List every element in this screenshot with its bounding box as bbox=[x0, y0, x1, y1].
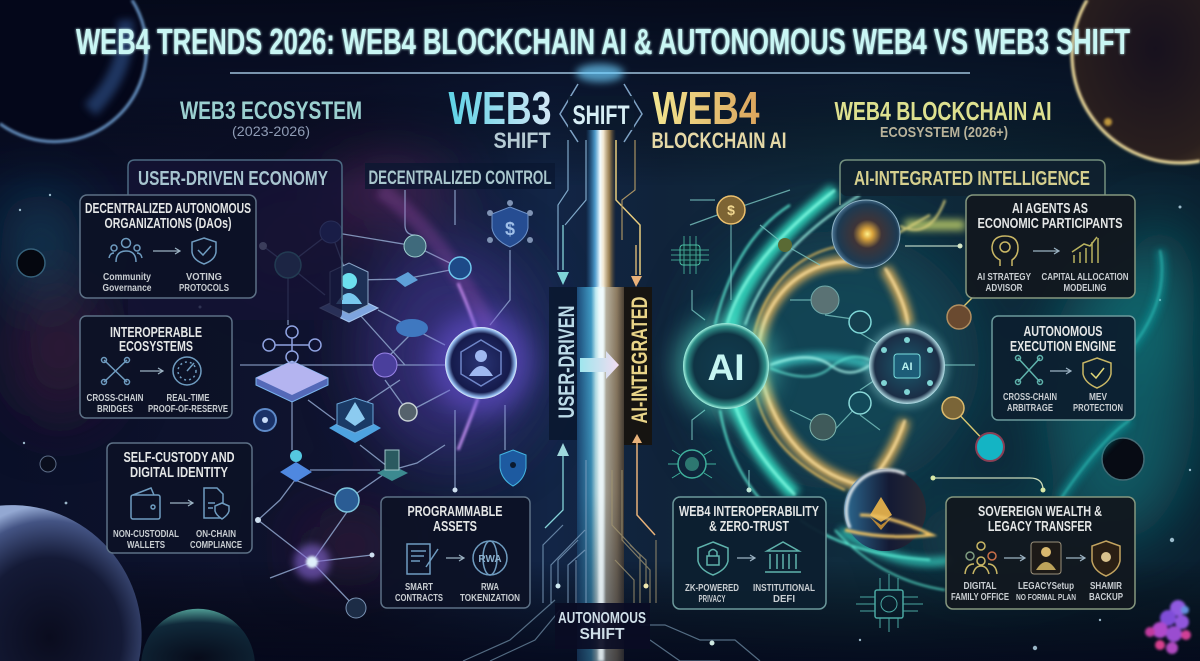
panel: DAOs: VOTING bbox=[186, 271, 222, 283]
panel: ai agents: ECONOMIC PARTICIPANTS bbox=[978, 215, 1122, 232]
icon: arbitrage cross bbox=[1016, 356, 1042, 384]
panel: sovereign wealth: DIGITAL bbox=[964, 580, 997, 592]
node: shield dollar: $ bbox=[505, 219, 515, 239]
panel: user-driven header bbox=[128, 160, 342, 320]
planet: bottom left small bbox=[141, 609, 255, 661]
panel: sovereign wealth: BACKUP bbox=[1089, 591, 1123, 603]
panel: DAOs: Governance bbox=[102, 282, 152, 294]
arrow: center shift right bbox=[580, 351, 619, 379]
node: ai orb bbox=[676, 316, 776, 416]
panel: ai agents: MODELING bbox=[1064, 282, 1106, 294]
energy swirls: web4 centre bbox=[715, 190, 1162, 590]
panel: ai agents: AI STRATEGY bbox=[977, 271, 1031, 283]
shift badge bbox=[560, 84, 642, 142]
node: web chip icon bbox=[668, 450, 716, 478]
label: decentralized control bbox=[365, 163, 555, 189]
node: shield dollar bbox=[487, 200, 533, 247]
network: web3 nodes bbox=[240, 190, 510, 608]
planet: bottom left large bbox=[0, 505, 142, 661]
arrow: web3 lane down bbox=[557, 225, 569, 285]
node: bottom chip bbox=[856, 574, 923, 632]
arrow: web4 lane up bbox=[632, 434, 655, 535]
panel: programmable assets: RWA bbox=[481, 581, 499, 593]
arrow: legacy to shamir bbox=[1066, 555, 1085, 561]
panel: interoperable ecosystems: BRIDGES bbox=[97, 403, 133, 415]
central beam divider bbox=[463, 130, 760, 661]
heading: web3 ecosystem: (2023-2026) bbox=[232, 123, 310, 139]
panel: programmable assets: PROGRAMMABLE bbox=[408, 503, 502, 520]
panel: self-custody: COMPLIANCE bbox=[190, 539, 242, 551]
panel: sovereign wealth: SHAMIR bbox=[1090, 580, 1122, 592]
heading: web3 ecosystem bbox=[180, 97, 362, 139]
panel: autonomous execution: MEV bbox=[1089, 391, 1107, 403]
arrow: contract to rwa bbox=[446, 555, 464, 561]
panel: web4 interoperability bbox=[673, 497, 826, 609]
heading: web4 ecosystem: WEB4 BLOCKCHAIN AI bbox=[834, 96, 1052, 126]
arrow: web4 lane down bbox=[631, 245, 642, 287]
panel: autonomous execution: CROSS-CHAIN bbox=[1003, 391, 1057, 403]
icon: wallet bbox=[131, 488, 160, 519]
panel: DAOs: DECENTRALIZED AUTONOMOUS bbox=[85, 200, 251, 217]
node: glowing block platform bbox=[256, 326, 328, 402]
arrow: arbitrage to protection bbox=[1050, 368, 1071, 374]
panel: interoperable ecosystems: PROOF-OF-RESERVE bbox=[148, 403, 228, 415]
label: autonomous shift bbox=[555, 603, 650, 649]
node: dollar coin bbox=[717, 196, 792, 252]
panel: programmable assets: SMART bbox=[405, 581, 433, 593]
node: ethereum platform bbox=[329, 398, 381, 443]
arrow: community to voting bbox=[153, 248, 180, 254]
node: user hex platform bbox=[320, 263, 378, 322]
network: web4 links bbox=[690, 190, 1046, 492]
planet: right dark bbox=[1102, 438, 1144, 480]
panel: ai-integrated header: AI-INTEGRATED INTELLIGENCE bbox=[854, 168, 1090, 190]
icon: bar chart bbox=[1072, 237, 1098, 263]
panel: programmable assets bbox=[381, 497, 530, 608]
panel: interoperable ecosystems: REAL-TIME bbox=[166, 392, 210, 404]
panel: interoperable ecosystems: CROSS-CHAIN bbox=[86, 392, 144, 404]
panel: self-custody: NON-CUSTODIAL bbox=[113, 528, 179, 540]
icon: smart contract bbox=[407, 544, 438, 574]
panel: ai agents bbox=[966, 195, 1135, 298]
panel: interoperable ecosystems: INTEROPERABLE bbox=[110, 324, 202, 341]
panel: DAOs bbox=[80, 195, 256, 298]
panel: web4 interoperability: INSTITUTIONAL bbox=[753, 582, 815, 594]
panel: ai agents: AI AGENTS AS bbox=[1012, 200, 1088, 217]
arrow: family to legacy bbox=[1004, 555, 1025, 561]
heading: web3 shift: SHIFT bbox=[494, 128, 551, 153]
node: gold swirl orb bbox=[832, 200, 900, 268]
panel: ai agents: CAPITAL ALLOCATION bbox=[1042, 271, 1128, 283]
node: small shield key bbox=[500, 450, 526, 486]
icon: cross-chain bridges bbox=[102, 358, 130, 384]
panel: sovereign wealth: SOVEREIGN WEALTH & bbox=[978, 503, 1102, 520]
panel: ai agents: ADVISOR bbox=[986, 282, 1023, 294]
node: small nodes bbox=[254, 221, 471, 618]
node: user platform low bbox=[280, 450, 312, 482]
panel: self-custody: ON-CHAIN bbox=[196, 528, 236, 540]
panel: DAOs: Community bbox=[103, 271, 151, 283]
planet: top left ring bbox=[0, 0, 147, 142]
heading: web3 ecosystem: WEB3 ECOSYSTEM bbox=[180, 97, 362, 125]
planet: left small dark bbox=[17, 249, 56, 472]
arrow: privacy to defi bbox=[737, 555, 755, 561]
text: rwa icon label: RWA bbox=[478, 554, 502, 565]
icon: legacy portrait bbox=[1031, 542, 1061, 574]
icon: voting shield bbox=[192, 238, 216, 264]
panel: sovereign wealth: LEGACY TRANSFER bbox=[988, 518, 1092, 535]
node: ai orb: AI bbox=[708, 347, 744, 388]
panel: autonomous execution: ARBITRAGE bbox=[1007, 402, 1053, 414]
panel: self-custody bbox=[107, 443, 252, 553]
node: chip top bbox=[671, 236, 709, 274]
node: dollar coin: $ bbox=[727, 202, 735, 218]
shift badge: SHIFT bbox=[572, 100, 630, 130]
panel: web4 interoperability: & ZERO-TRUST bbox=[709, 518, 789, 535]
heading: web4 blockchain ai: BLOCKCHAIN AI bbox=[652, 128, 786, 153]
panel: interoperable ecosystems: ECOSYSTEMS bbox=[119, 338, 193, 355]
node: ai chip orb: AI bbox=[902, 361, 912, 373]
panel: web4 interoperability: DEFI bbox=[773, 593, 795, 605]
label: ai-integrated vertical: AI-INTEGRATED bbox=[627, 296, 652, 424]
arrow: wallet to compliance bbox=[170, 500, 193, 506]
panel: sovereign wealth: FAMILY OFFICE bbox=[951, 591, 1009, 603]
panel: web4 interoperability: PRIVACY bbox=[698, 593, 726, 605]
label: autonomous shift: SHIFT bbox=[580, 626, 625, 643]
logo: molecule cluster bbox=[1145, 600, 1191, 654]
panel: programmable assets: TOKENIZATION bbox=[460, 592, 520, 604]
label: decentralized control: DECENTRALIZED CONTROL bbox=[368, 168, 552, 189]
label: user-driven vertical bbox=[549, 287, 579, 440]
panel: user-driven header: USER-DRIVEN ECONOMY bbox=[138, 168, 328, 190]
panel: autonomous execution: EXECUTION ENGINE bbox=[1010, 338, 1116, 355]
icon: privacy lock shield bbox=[698, 542, 728, 575]
icon: compliance doc bbox=[204, 488, 229, 519]
node: small spheres bbox=[810, 286, 1004, 461]
panel: DAOs: PROTOCOLS bbox=[179, 282, 229, 294]
node: calculator platform bbox=[377, 450, 408, 481]
icon: rwa globe bbox=[473, 541, 507, 575]
panel: ai-integrated header bbox=[840, 160, 1105, 205]
heading: web3 shift bbox=[448, 82, 552, 153]
arrow: bridges to proof bbox=[140, 368, 163, 374]
heading: web4 ecosystem bbox=[834, 96, 1052, 141]
arrow: head to chart bbox=[1033, 248, 1059, 254]
panel: autonomous execution: PROTECTION bbox=[1073, 402, 1123, 414]
panel: web4 interoperability: WEB4 INTEROPERABILITY bbox=[679, 503, 819, 520]
panel: self-custody: WALLETS bbox=[127, 539, 165, 551]
node: central user orb bbox=[429, 311, 548, 415]
label: ai-integrated vertical bbox=[624, 287, 652, 445]
node: ai chip orb bbox=[865, 324, 949, 408]
icon: ai head bbox=[992, 236, 1018, 266]
panel: sovereign wealth: LEGACYSetup bbox=[1018, 580, 1074, 592]
panel: interoperable ecosystems bbox=[80, 316, 232, 418]
panel: DAOs: ORGANIZATIONS (DAOs) bbox=[104, 215, 232, 232]
label: autonomous shift: AUTONOMOUS bbox=[558, 610, 646, 627]
icon: shamir shield bbox=[1092, 541, 1120, 576]
icon: gauge bbox=[173, 357, 201, 385]
panel: autonomous execution bbox=[992, 316, 1135, 420]
icon: family office group bbox=[965, 542, 997, 574]
heading: web4 blockchain ai: WEB4 bbox=[652, 82, 760, 134]
panel: autonomous execution: AUTONOMOUS bbox=[1024, 323, 1102, 340]
node: ethereum orb bbox=[844, 469, 932, 551]
panel: sovereign wealth bbox=[946, 497, 1135, 609]
heading: web4 ecosystem: ECOSYSTEM (2026+) bbox=[880, 124, 1008, 141]
panel: sovereign wealth: NO FORMAL PLAN bbox=[1016, 592, 1076, 602]
icon: community group bbox=[109, 238, 142, 262]
panel: programmable assets: CONTRACTS bbox=[395, 592, 443, 604]
top light line bbox=[230, 64, 970, 82]
icon: bank bbox=[765, 542, 801, 572]
planet: top right golden bbox=[1072, 0, 1200, 163]
arrow: web3 lane up bbox=[545, 443, 569, 528]
label: user-driven vertical: USER-DRIVEN bbox=[554, 306, 579, 418]
icon: mev shield bbox=[1083, 358, 1111, 388]
panel: self-custody: SELF-CUSTODY AND bbox=[124, 449, 235, 466]
heading: web3 shift: WEB3 bbox=[448, 82, 552, 134]
panel: web4 interoperability: ZK-POWERED bbox=[685, 582, 739, 594]
panel: programmable assets: ASSETS bbox=[433, 518, 477, 535]
panel: self-custody: DIGITAL IDENTITY bbox=[130, 464, 228, 481]
